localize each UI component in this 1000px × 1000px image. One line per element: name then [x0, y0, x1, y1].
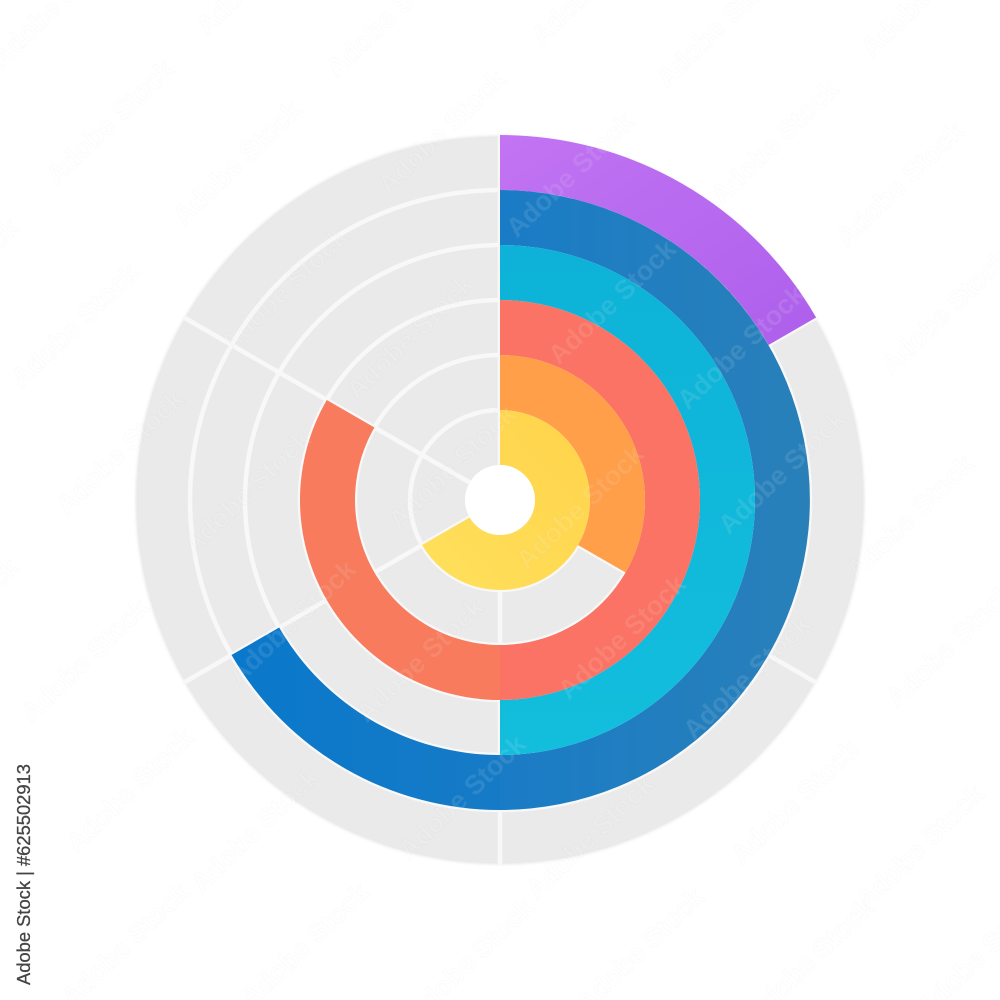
watermark pattern: Adobe Stock — [40, 53, 180, 190]
watermark pattern: Adobe Stock — [177, 423, 317, 560]
watermark pattern: Adobe Stock — [214, 221, 354, 358]
watermark pattern: Adobe Stock — [677, 608, 817, 745]
ring: blue segment — [232, 190, 810, 810]
watermark pattern: Adobe Stock — [520, 768, 660, 905]
watermark pattern: Adobe Stock — [725, 733, 865, 870]
stock image id label: Adobe Stock | #625502913 — [14, 764, 34, 985]
ring: teal segment — [500, 245, 755, 755]
watermark pattern: Adobe Stock — [372, 63, 512, 200]
watermark pattern: Adobe Stock — [510, 438, 650, 575]
watermark pattern: Adobe Stock — [552, 568, 692, 705]
ring: yellow segment — [422, 410, 590, 590]
watermark pattern: Adobe Stock — [350, 591, 490, 728]
watermark pattern: Adobe Stock — [15, 591, 155, 728]
watermark pattern: Adobe Stock — [222, 553, 362, 690]
ring: orange segment — [500, 355, 645, 572]
watermark pattern: Adobe Stock — [671, 278, 811, 415]
watermark pattern: Adobe Stock — [850, 778, 990, 915]
watermark pattern: Adobe Stock — [50, 383, 190, 520]
watermark pattern: Adobe Stock — [500, 106, 640, 243]
watermark pattern: Adobe Stock — [5, 256, 145, 393]
watermark pattern: Adobe Stock — [840, 448, 980, 585]
watermark pattern: Adobe Stock — [382, 398, 522, 535]
watermark pattern: Adobe Stock — [60, 721, 200, 858]
watermark pattern: Adobe Stock — [185, 761, 325, 898]
watermark pattern: Adobe Stock — [542, 233, 682, 370]
watermark pattern: Adobe Stock — [340, 268, 480, 405]
watermark pattern: Adobe Stock — [830, 115, 970, 252]
watermark pattern: Adobe Stock — [705, 73, 845, 210]
watermark pattern: Adobe Stock — [712, 403, 852, 540]
watermark pattern: Adobe Stock — [392, 728, 532, 865]
watermark pattern: Adobe Stock — [167, 94, 307, 231]
panel: grey background rings — [136, 135, 864, 865]
centre hole — [465, 465, 535, 535]
ring: coral segment — [300, 300, 700, 700]
ring: purple segment — [500, 135, 816, 345]
